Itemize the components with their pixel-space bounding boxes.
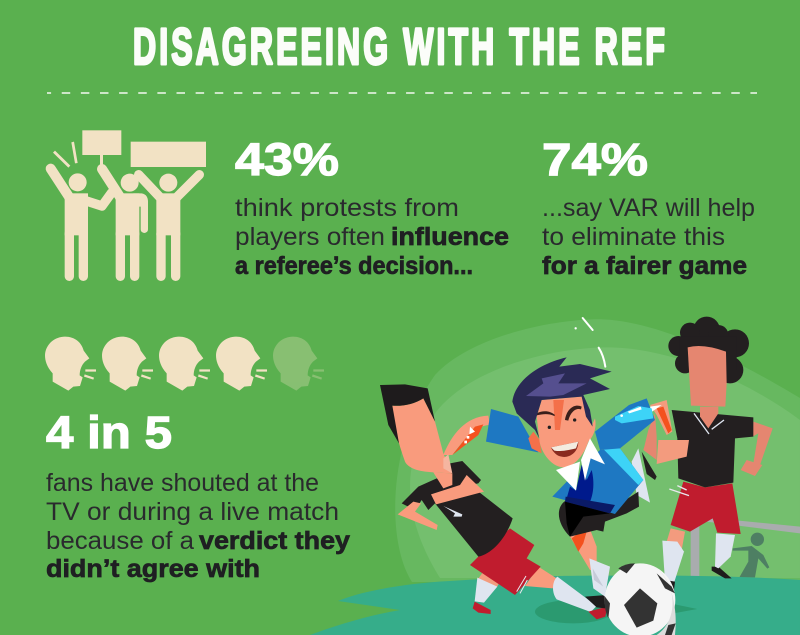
pitch	[310, 576, 800, 635]
arrow marks: motion dashes	[575, 318, 605, 367]
text: protests influence decisions: a referee’s decision...	[235, 252, 473, 280]
illustration: football players	[310, 317, 800, 635]
text: fans shouting: because of a	[46, 527, 194, 555]
icon: five shouting heads	[45, 337, 324, 391]
goal	[691, 517, 800, 579]
football	[605, 563, 676, 635]
text: protests influence decisions: think protests from	[235, 194, 459, 222]
text: fans shouting: TV or during a live match	[46, 498, 339, 526]
text: VAR fairer game: for a fairer game	[542, 252, 747, 280]
player: right, curly hair	[643, 317, 773, 590]
stat: 4 in 5: 4 in 5	[46, 407, 172, 458]
text: VAR fairer game: to eliminate this	[542, 223, 725, 251]
text: protests influence decisions: players often	[235, 223, 385, 251]
player: centre, referee in blue	[486, 357, 657, 608]
text: fans shouting: verdict they	[199, 527, 350, 555]
icon: protesters with placards	[51, 130, 206, 276]
text: protests influence decisions	[235, 194, 509, 280]
background glow	[395, 319, 800, 582]
text: VAR fairer game	[542, 194, 755, 280]
text: protests influence decisions: influence	[391, 223, 509, 251]
player: left, tackling	[380, 384, 607, 619]
stat: 43%: 43%	[235, 134, 339, 185]
text: fans shouting: fans have shouted at the	[46, 469, 319, 497]
text: VAR fairer game: ...say VAR will help	[542, 194, 755, 222]
text: fans shouting: didn’t agree with	[46, 555, 260, 583]
stat: 74%: 74%	[542, 134, 648, 185]
text: fans shouting	[46, 469, 350, 583]
